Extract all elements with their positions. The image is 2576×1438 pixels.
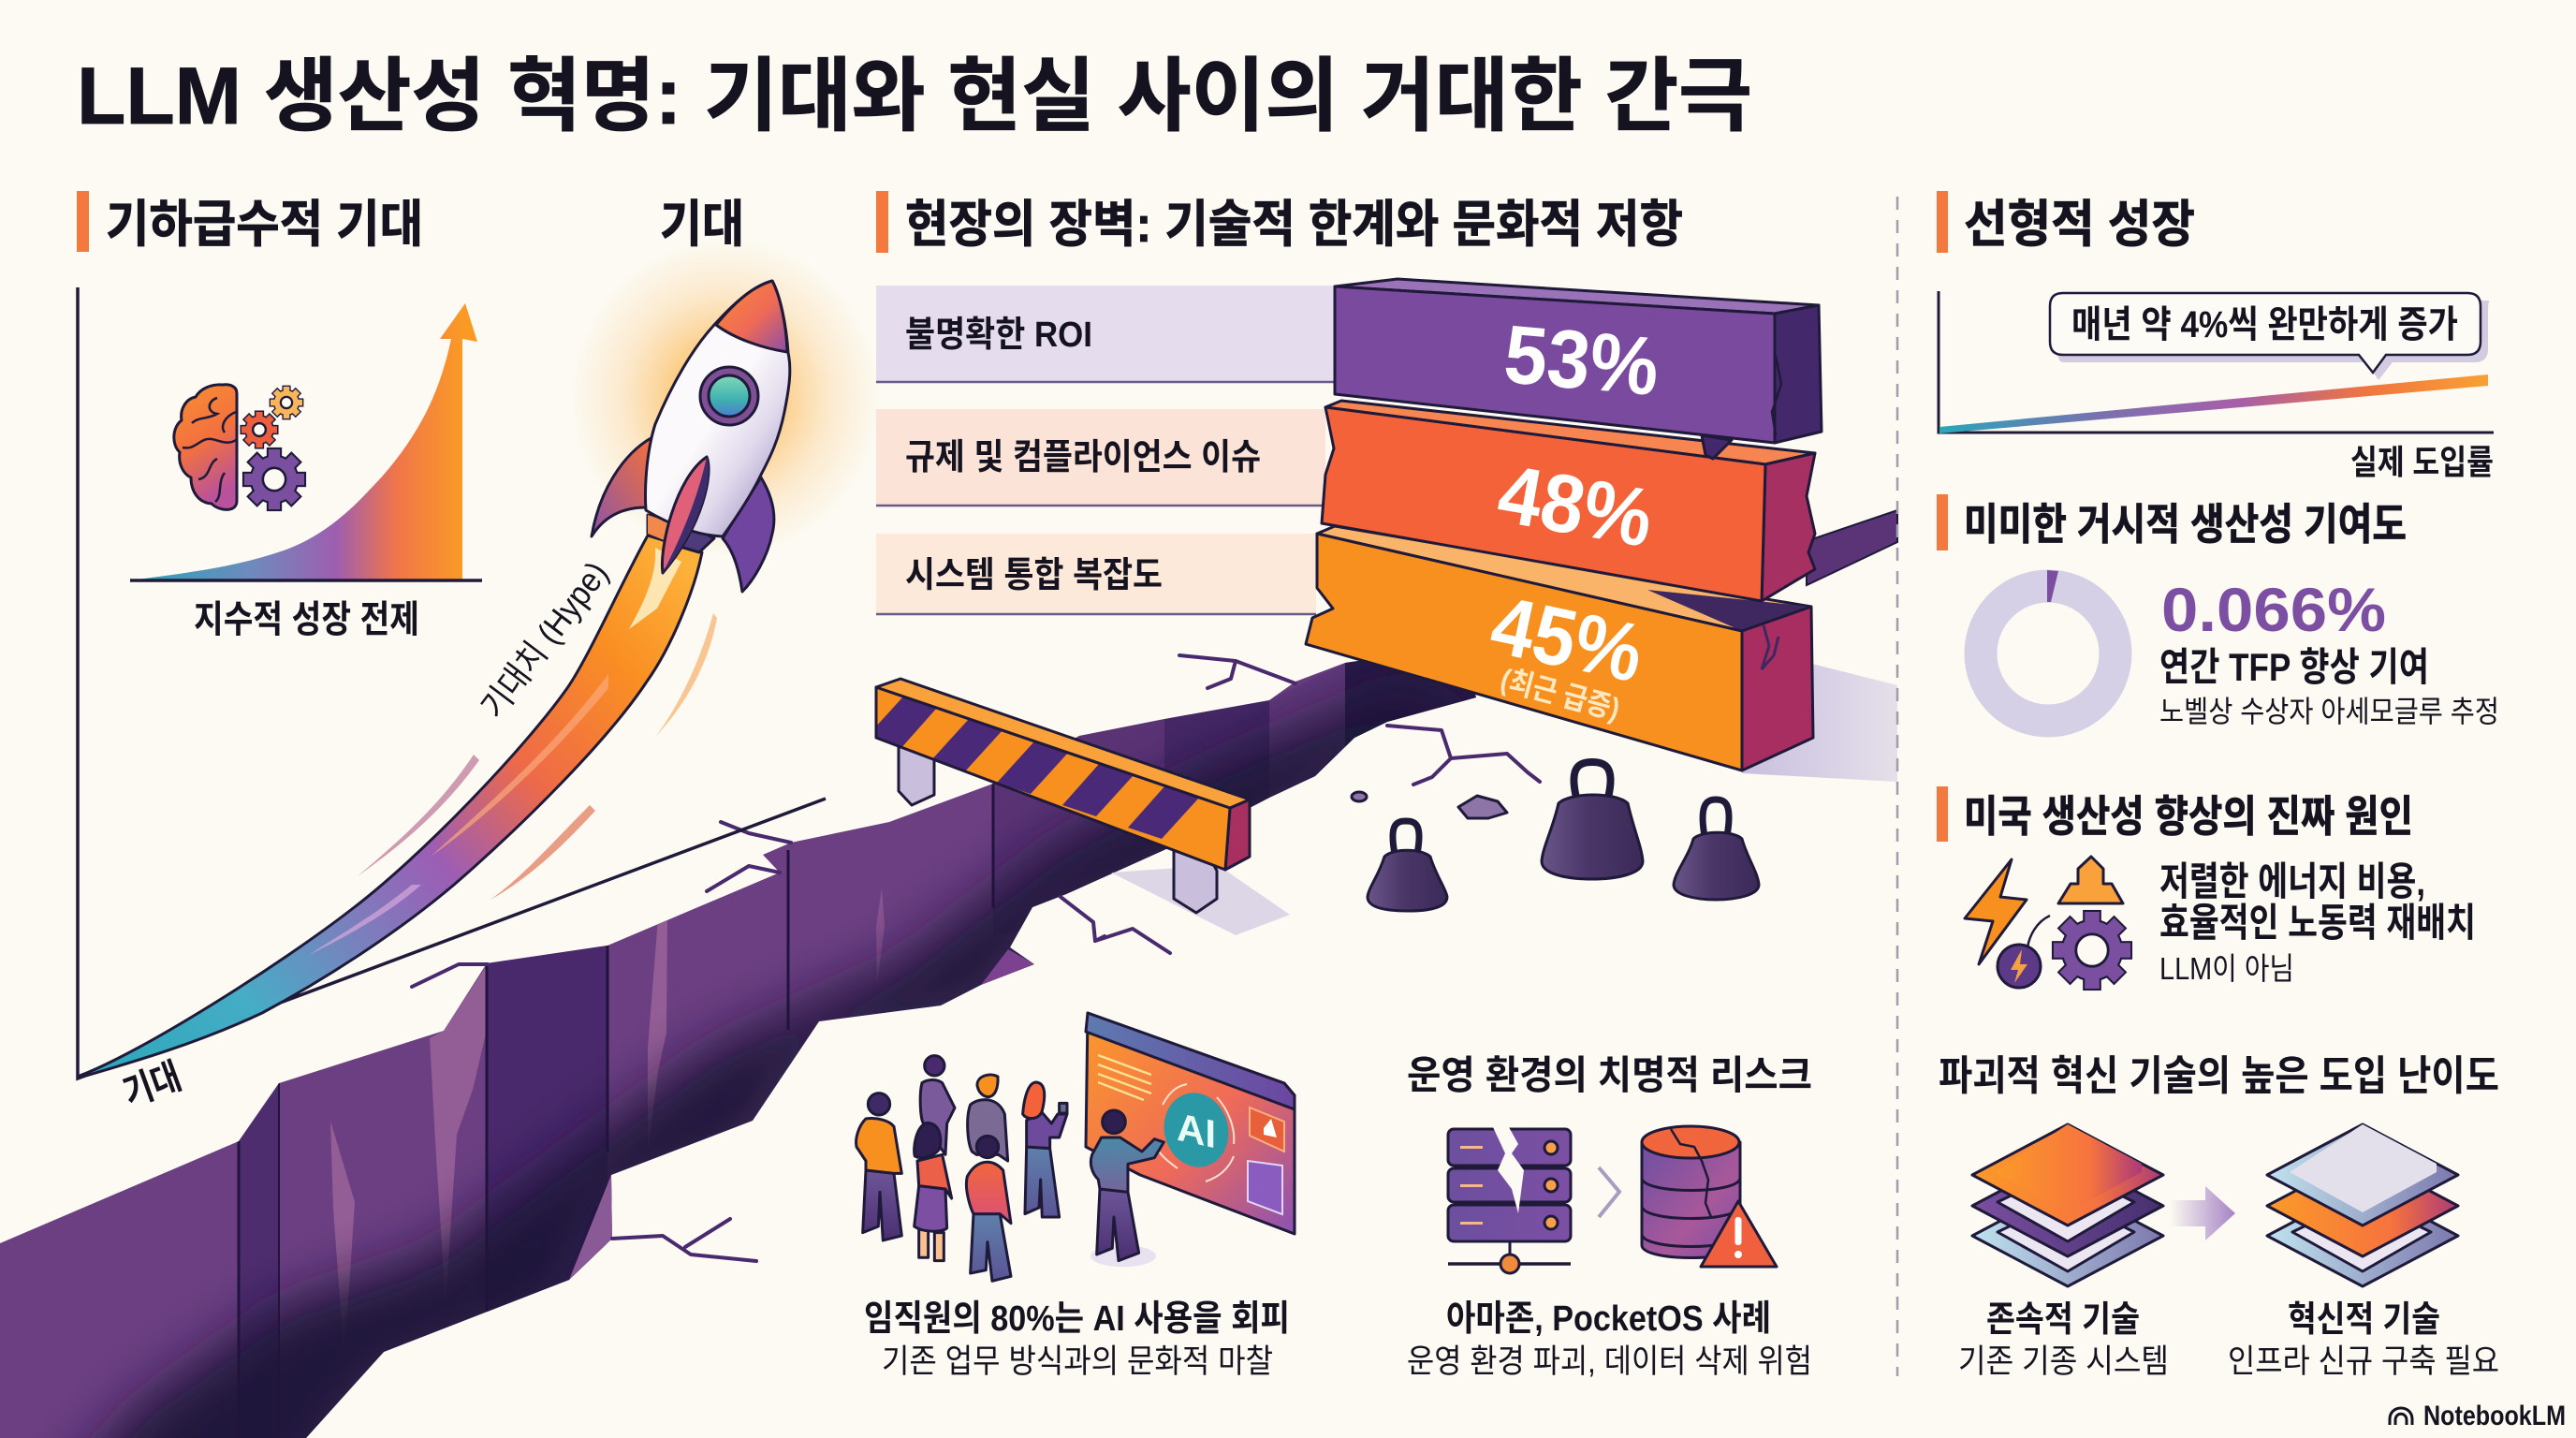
panel: disruptive difficulty — [1939, 1053, 2499, 1380]
heading: risk: 운영 환경의 치명적 리스크 — [1407, 1053, 1812, 1097]
person 6 — [966, 1136, 1011, 1281]
rocket trail — [80, 536, 702, 1078]
heading: macro: 미미한 거시적 생산성 기여도 — [1964, 500, 2407, 549]
person 5 — [915, 1123, 952, 1261]
floor shadows — [1111, 655, 1897, 935]
heading: linear growth: 선형적 성장 — [1964, 197, 2195, 253]
text: sustaining: 존속적 기술 — [1986, 1300, 2140, 1340]
heading: real cause: 미국 생산성 향상의 진짜 원인 — [1964, 792, 2413, 841]
panel: exponential hype — [77, 191, 880, 1114]
wall block: 53% — [1335, 279, 1822, 459]
barrier — [866, 679, 1250, 913]
callout — [2050, 293, 2490, 380]
wall block: 45%: 45% — [1484, 578, 1651, 699]
icon: energy and labor — [1965, 857, 2130, 989]
chart axes — [78, 287, 826, 1078]
text: sustaining — [1958, 1300, 2169, 1380]
illustration: people — [856, 1056, 1164, 1281]
label bar: ROI — [876, 286, 1335, 382]
text: sustaining: 기존 기종 시스템 — [1958, 1343, 2169, 1380]
heading: difficulty: 파괴적 혁신 기술의 높은 도입 난이도 — [1939, 1053, 2499, 1099]
person 1 — [856, 1093, 901, 1240]
text: causes: 저렬한 에너지 비용, — [2159, 859, 2425, 903]
text: disruptive: 인프라 신규 구축 필요 — [2228, 1343, 2499, 1380]
icon: brain and gears — [174, 385, 304, 509]
illustration: ground chasm — [0, 510, 1897, 1438]
label: hype: 기대치 (Hype) — [474, 554, 616, 726]
heading: barriers: 현장의 장벽: 기술적 한계와 문화적 저항 — [905, 197, 1683, 253]
text: cultural friction: 기존 업무 방식과의 문화적 마찰 — [882, 1343, 1273, 1380]
icon: rocket — [571, 239, 880, 592]
text: causes — [2159, 859, 2476, 986]
icon: broken server — [1448, 1127, 1571, 1273]
text: case: 아마존, PocketOS 사례 — [1446, 1299, 1771, 1339]
wall block: 53%: 53% — [1500, 307, 1662, 413]
panel: macro productivity — [1937, 494, 2499, 728]
person 7: presenter — [1090, 1110, 1164, 1267]
panel: field barriers — [866, 191, 1897, 935]
text: causes: 효율적인 노동력 재배치 — [2159, 901, 2476, 945]
label bar: ROI: 불명확한 ROI — [905, 315, 1092, 355]
text: 80% avoid AI: 임직원의 80%는 AI 사용을 회피 — [864, 1299, 1290, 1339]
arrow — [2170, 1186, 2235, 1240]
heading: rocket label: 기대 — [660, 197, 744, 253]
title: LLM 생산성 혁명: 기대와 현실 사이의 거대한 간극 — [77, 51, 1752, 141]
mini exponential chart — [130, 303, 482, 640]
stat: 0.066%: 0.066% — [2161, 575, 2386, 644]
icon: weights — [1368, 762, 1759, 911]
icon: disruptive stack — [2267, 1124, 2458, 1286]
label bar: integration — [876, 534, 1316, 614]
wall block: 45%: (최근 급증) — [1497, 662, 1623, 726]
heading: exponential expectation: 기하급수적 기대 — [106, 197, 423, 253]
text: disruptive: 혁신적 기술 — [2288, 1300, 2440, 1340]
callout: 매년 약 4%씩 완만하게 증가 — [2071, 304, 2458, 345]
axis label: 실제 도입률 — [2350, 443, 2494, 481]
arrow: chevron — [1599, 1167, 1619, 1217]
text: disruptive — [2228, 1300, 2499, 1380]
text: causes: LLM이 아님 — [2159, 951, 2294, 986]
rocks — [1352, 792, 1507, 818]
label bar: regulation: 규제 및 컴플라이언스 이슈 — [905, 438, 1261, 477]
panel: operational risk — [1407, 1053, 1812, 1380]
person 4 — [1023, 1082, 1067, 1217]
icon: sustaining stack — [1972, 1124, 2163, 1286]
axis label: 기대 — [118, 1056, 186, 1114]
panel: linear growth — [1937, 191, 2494, 481]
wall block: 48%: 48% — [1491, 447, 1660, 565]
illustration: AI screen — [1086, 1013, 1295, 1234]
speed streaks — [358, 613, 717, 900]
label bar: regulation — [876, 409, 1325, 506]
stat label: 연간 TFP 향상 기여 — [2159, 645, 2429, 689]
line chart — [1939, 291, 2494, 433]
panel: AI avoidance — [856, 1013, 1295, 1380]
illustration: AI screen: AI — [1177, 1105, 1216, 1156]
stat source: 노벨상 수상자 아세모글루 추정 — [2159, 695, 2499, 728]
label bar: integration: 시스템 통합 복잡도 — [905, 556, 1163, 595]
person 3 — [968, 1075, 1008, 1161]
person 2 — [920, 1056, 955, 1154]
donut chart — [1981, 570, 2115, 721]
panel: real cause — [1937, 786, 2476, 989]
wall block: 45% — [1306, 526, 1813, 770]
caption: 지수적 성장 전제 — [194, 599, 419, 640]
text: risk detail: 운영 환경 파괴, 데이터 삭제 위험 — [1407, 1343, 1812, 1380]
icon: cracked database with warning — [1642, 1126, 1777, 1267]
wall block: 48% — [1322, 401, 1815, 601]
